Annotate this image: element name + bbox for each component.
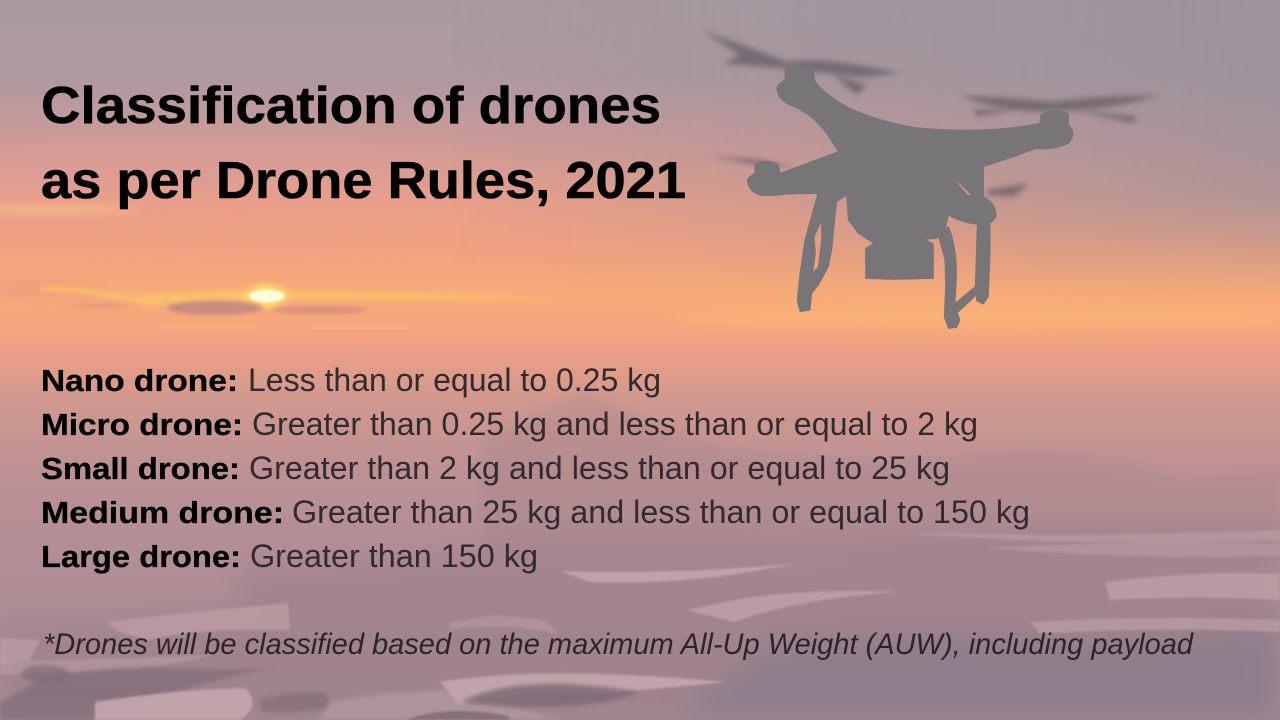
background: distant mountains and lakes xyxy=(0,392,1280,720)
large drone line: Greater than 150 kg xyxy=(250,538,538,574)
medium drone line: Medium drone: xyxy=(41,495,284,530)
medium drone line: Greater than 25 kg and less than or equal to 150 kg xyxy=(292,494,1030,530)
body shell and arms xyxy=(747,66,1073,245)
small drone line: Small drone: xyxy=(41,451,240,486)
classification list xyxy=(41,362,1030,574)
small drone line: Greater than 2 kg and less than or equal to 25 kg xyxy=(249,450,950,486)
right landing leg xyxy=(938,224,990,328)
drone body xyxy=(747,66,1073,328)
drone silhouette xyxy=(703,32,1158,328)
title xyxy=(41,77,686,210)
camera gimbal xyxy=(866,237,933,279)
nano drone line: Nano drone: xyxy=(41,363,238,398)
nano drone line xyxy=(41,362,661,398)
footnote: *Drones will be classified based on the maximum All-Up Weight (AUW), including payload xyxy=(43,628,1194,661)
large drone line xyxy=(41,538,538,574)
sun and glowing clouds xyxy=(40,280,560,329)
large drone line: Large drone: xyxy=(41,539,241,574)
left landing leg xyxy=(797,192,837,312)
nano drone line: Less than or equal to 0.25 kg xyxy=(248,362,661,398)
title: Classification of drones xyxy=(41,77,661,135)
drone propellers xyxy=(703,32,1158,197)
micro drone line: Greater than 0.25 kg and less than or equal to 2 kg xyxy=(252,406,978,442)
micro drone line: Micro drone: xyxy=(41,407,243,442)
title: as per Drone Rules, 2021 xyxy=(41,152,686,210)
